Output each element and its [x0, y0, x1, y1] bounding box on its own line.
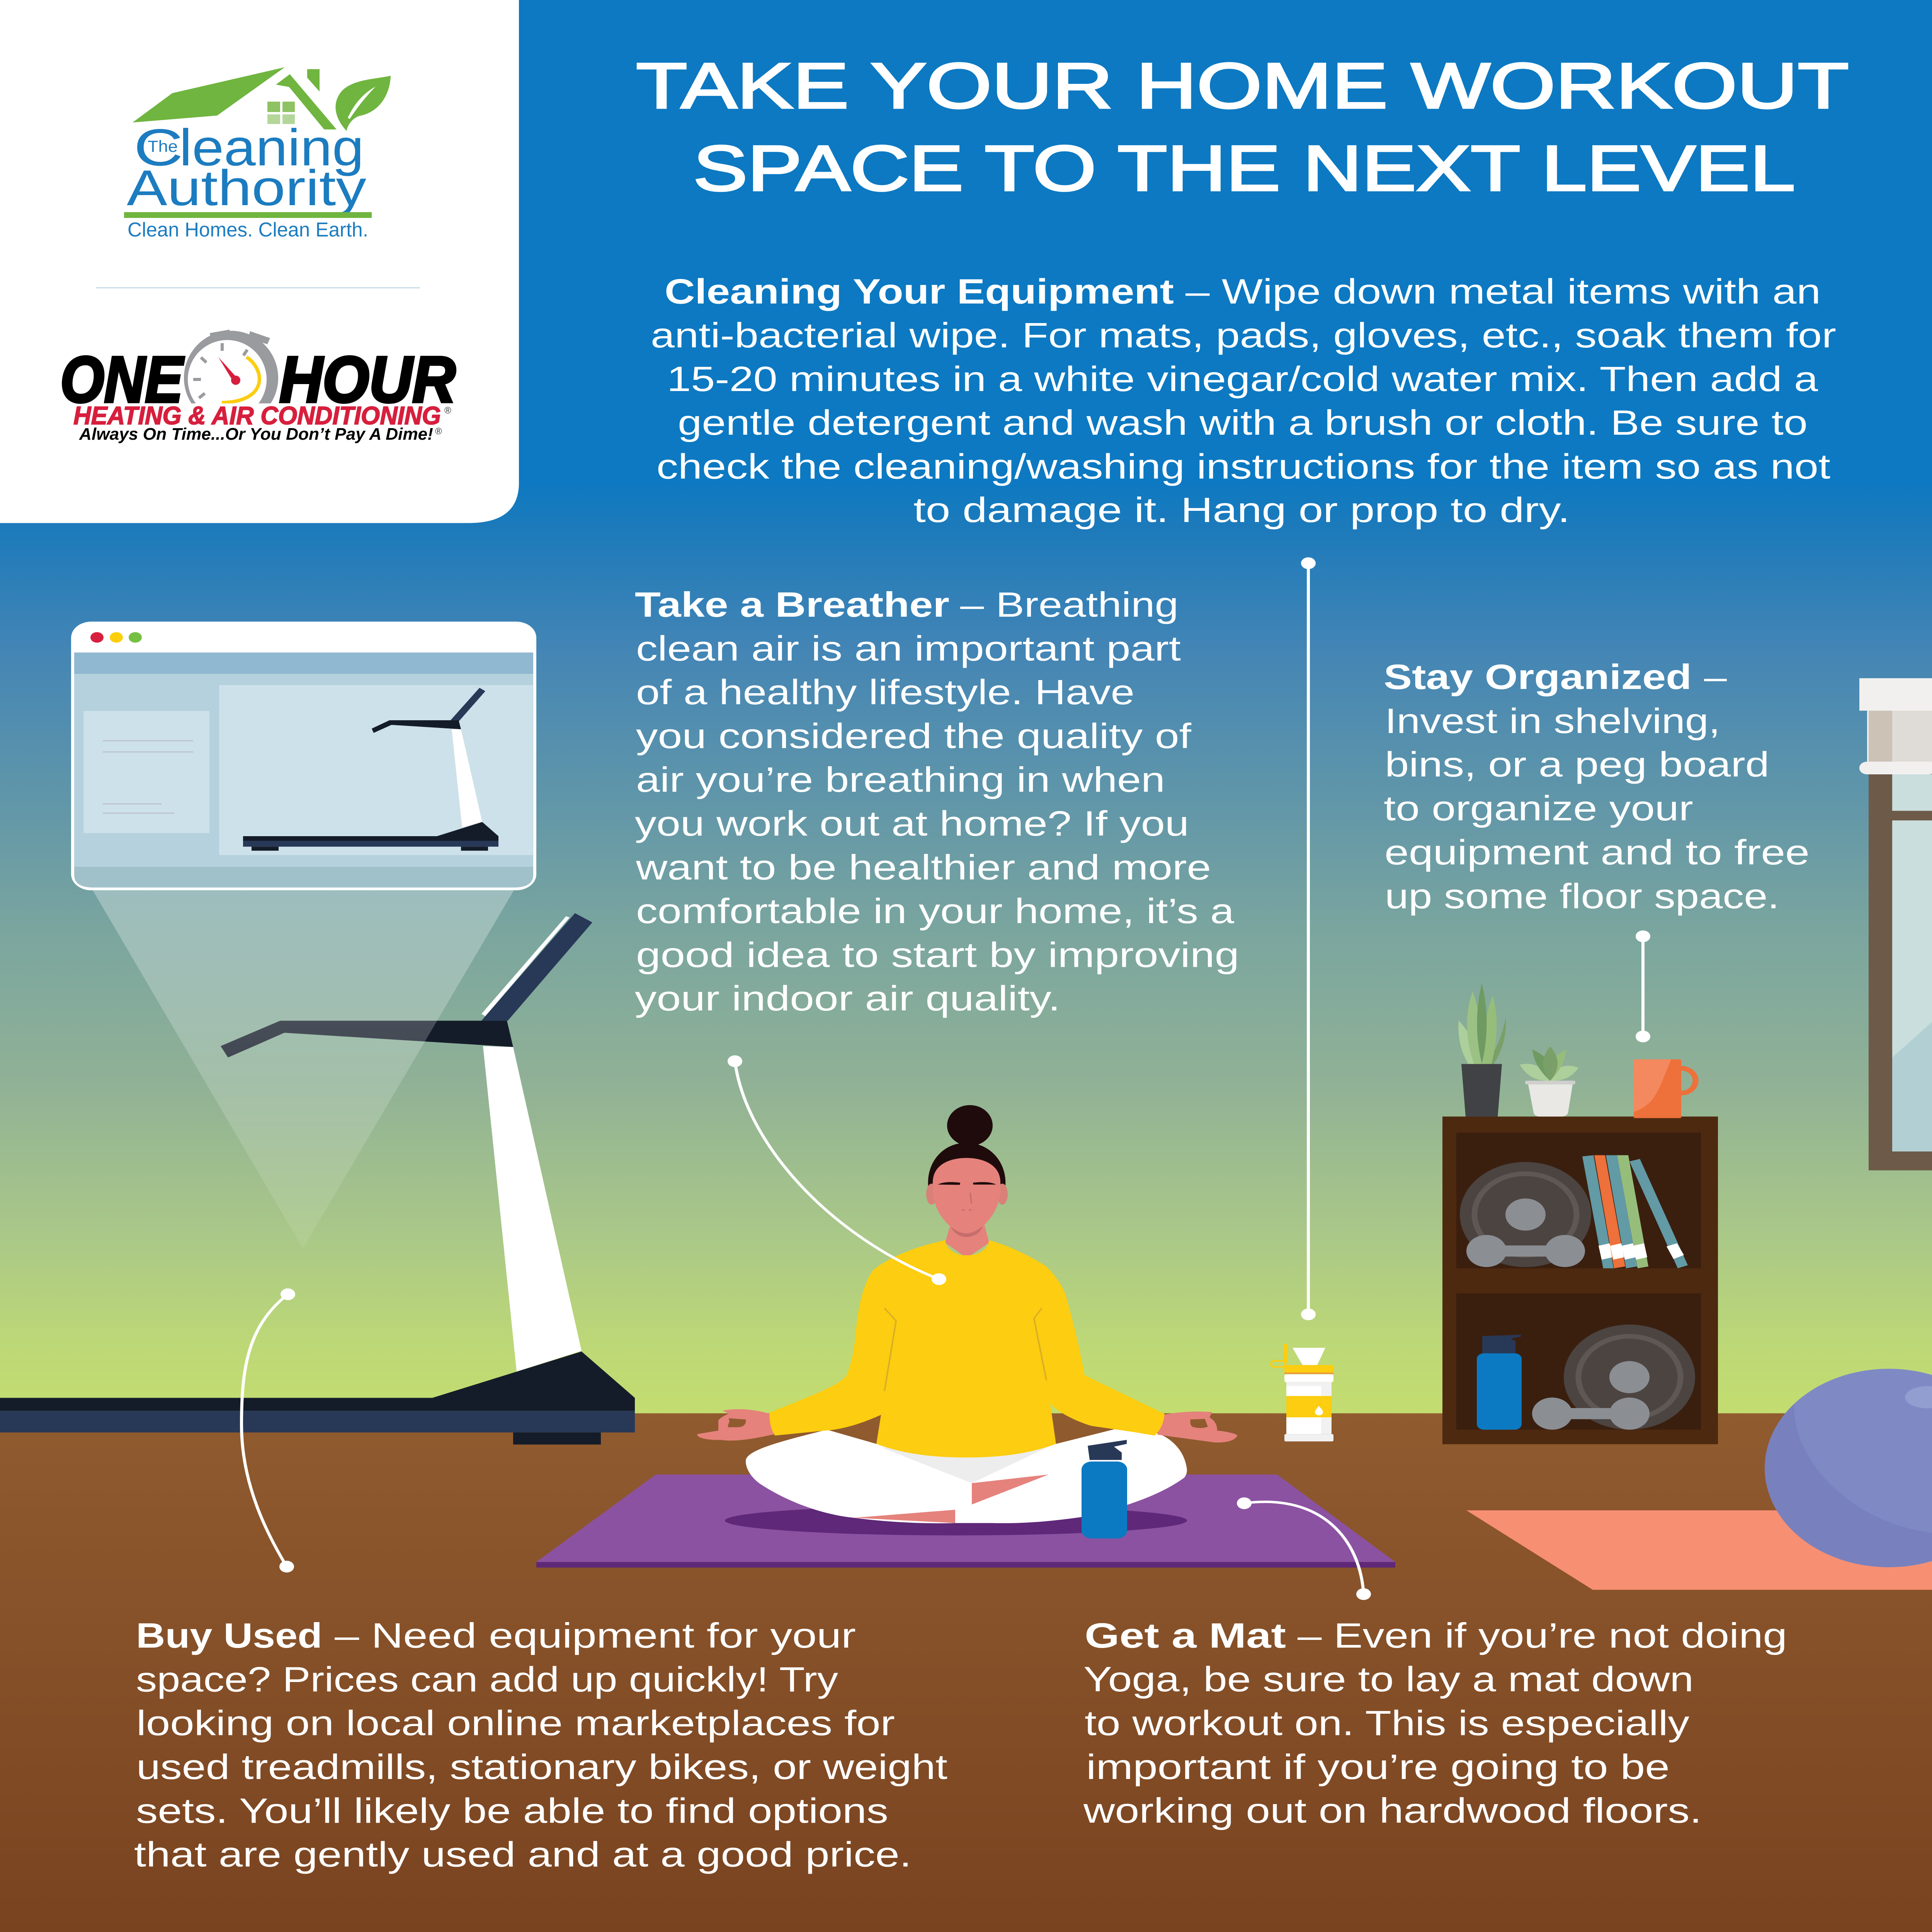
text block: Take a Breather: good idea to start by improving	[636, 935, 1239, 975]
weight plate and dumbbell, top shelf	[1460, 1162, 1591, 1267]
text block: Cleaning Your Equipment: – Wipe down metal items with an	[1185, 272, 1821, 311]
small bottle on shelf	[1477, 1335, 1522, 1430]
text block: Take a Breather: air you’re breathing in when	[636, 760, 1165, 799]
window with blind	[1859, 678, 1932, 1170]
panel: white logo card	[0, 0, 519, 523]
text block: Stay Organized: equipment and to free	[1384, 833, 1810, 872]
text block: Take a Breather: you work out at home? If you	[635, 804, 1189, 843]
text block: Take a Breather: your indoor air quality.	[635, 979, 1060, 1018]
text block: Get a Mat: to workout on. This is especially	[1085, 1703, 1689, 1743]
treadmill upright post	[483, 1046, 582, 1372]
weight plate and dumbbell, bottom shelf	[1532, 1325, 1695, 1430]
logo: The Cleaning Authority: Clean Homes. Clean Earth.	[128, 219, 368, 241]
logo: The Cleaning Authority: Authority	[127, 160, 366, 216]
orange mug	[1634, 1060, 1696, 1118]
text block: Stay Organized: –	[1704, 657, 1727, 697]
background: wooden floor	[0, 1413, 1932, 1932]
callout line: Get a Mat	[1237, 1497, 1371, 1600]
crossed legs	[746, 1429, 1187, 1523]
ears	[926, 1184, 1008, 1205]
window control dots	[90, 632, 142, 643]
woman meditating	[697, 1105, 1237, 1539]
text block: Stay Organized	[1384, 657, 1810, 916]
text block: Buy Used: used treadmills, stationary bikes, or weight	[136, 1747, 947, 1786]
text block: Take a Breather: you considered the quality of	[636, 716, 1191, 755]
projection light cone	[93, 890, 514, 1248]
text block: Get a Mat: – Even if you’re not doing	[1298, 1616, 1787, 1655]
text block: Buy Used: sets. You’ll likely be able to find options	[136, 1791, 888, 1830]
text block: Take a Breather: clean air is an important part	[636, 629, 1181, 668]
cleaning spray bottle	[1271, 1344, 1333, 1441]
text block: Buy Used: looking on local online marketplaces for	[136, 1703, 895, 1743]
text block: Take a Breather: comfortable in your home, it’s a	[636, 891, 1235, 930]
text block: Take a Breather	[635, 585, 1239, 1018]
title: SPACE TO THE NEXT LEVEL	[693, 132, 1795, 204]
chin shadow	[951, 1224, 982, 1237]
logo: One Hour Heating and Air Conditioning: ®	[444, 405, 451, 416]
callout line: Take a Breather	[728, 1055, 946, 1285]
logo: One Hour Heating and Air Conditioning: HOUR	[279, 343, 456, 416]
text block: Stay Organized: Stay Organized	[1384, 657, 1692, 697]
background: sky gradient	[0, 0, 1932, 1414]
listing text card	[83, 711, 209, 833]
text block: Cleaning Your Equipment: gentle detergent and wash with a brush or cloth. Be sure to	[678, 403, 1808, 442]
treadmill handle	[221, 1021, 513, 1058]
yoga mat	[536, 1475, 1395, 1568]
text block: Cleaning Your Equipment: Cleaning Your Equipment	[665, 272, 1174, 311]
neck	[945, 1224, 989, 1258]
orange exercise mat	[1466, 1510, 1932, 1590]
callout line: Cleaning Your Equipment	[1301, 557, 1316, 1320]
logo: One Hour Heating and Air Conditioning: ONE	[60, 343, 184, 416]
hair	[928, 1143, 1005, 1186]
callout line: Buy Used	[242, 1288, 295, 1573]
text block: Cleaning Your Equipment: check the cleaning/washing instructions for the item so as not	[656, 447, 1830, 486]
exercise ball	[1765, 1360, 1932, 1567]
text block: Take a Breather: of a healthy lifestyle. Have	[636, 672, 1134, 712]
text block: Buy Used: space? Prices can add up quickly! Try	[136, 1660, 838, 1699]
text block: Stay Organized: Invest in shelving,	[1385, 701, 1720, 740]
right hand	[1157, 1412, 1237, 1442]
text block: Get a Mat: Get a Mat	[1085, 1616, 1286, 1655]
text block: Get a Mat: Yoga, be sure to lay a mat down	[1083, 1660, 1694, 1699]
text block: Cleaning Your Equipment	[651, 272, 1836, 530]
mini treadmill	[243, 688, 498, 851]
text block: Take a Breather: Take a Breather	[635, 585, 949, 624]
face	[933, 1158, 1000, 1233]
text block: Stay Organized: bins, or a peg board	[1385, 745, 1769, 784]
sweater	[769, 1240, 1165, 1458]
treadmill console arm	[481, 913, 592, 1021]
left hand	[697, 1409, 775, 1440]
books	[1582, 1155, 1688, 1268]
water bottle	[1082, 1440, 1127, 1539]
logo: One Hour Heating and Air Conditioning: Always On Time...Or You Don’t Pay A Dime!	[79, 425, 433, 444]
text block: Take a Breather: – Breathing	[960, 585, 1179, 624]
title	[636, 49, 1849, 204]
logo: The Cleaning Authority	[124, 67, 391, 241]
text block: Buy Used: that are gently used and at a good price.	[134, 1835, 912, 1874]
logo: One Hour Heating and Air Conditioning	[60, 330, 456, 444]
text block: Cleaning Your Equipment: anti-bacterial wipe. For mats, pads, gloves, etc., soak them for	[651, 316, 1836, 355]
tall plant in dark pot	[1458, 983, 1506, 1117]
text block: Take a Breather: want to be healthier and more	[636, 848, 1211, 887]
text block: Stay Organized: to organize your	[1384, 789, 1693, 828]
browser window with treadmill listing	[71, 622, 536, 1248]
title: TAKE YOUR HOME WORKOUT	[636, 49, 1849, 122]
text block: Buy Used: Buy Used	[136, 1616, 322, 1655]
logo: The Cleaning Authority: The	[148, 137, 178, 155]
text block: Get a Mat: important if you’re going to be	[1086, 1747, 1670, 1786]
text block: Stay Organized: up some floor space.	[1385, 876, 1779, 916]
treadmill	[0, 913, 635, 1444]
bookshelf with weights, books and bottle	[1442, 1117, 1718, 1444]
hair bun	[947, 1105, 993, 1146]
listing image panel	[219, 685, 533, 855]
succulent in white pot	[1520, 1046, 1578, 1117]
logo: One Hour Heating and Air Conditioning: ®	[435, 426, 442, 437]
text block: Cleaning Your Equipment: to damage it. Hang or prop to dry.	[913, 490, 1570, 530]
treadmill base	[0, 1352, 635, 1444]
text block: Get a Mat: working out on hardwood floors.	[1083, 1791, 1702, 1830]
text block: Get a Mat	[1083, 1616, 1787, 1830]
callout line: Stay Organized	[1636, 930, 1650, 1043]
logo: One Hour Heating and Air Conditioning: HEATING & AIR CONDITIONING	[73, 401, 441, 430]
logo: The Cleaning Authority: C	[134, 118, 183, 177]
logo: The Cleaning Authority: leaning	[179, 119, 364, 177]
text block: Buy Used: – Need equipment for your	[335, 1616, 856, 1655]
text block: Cleaning Your Equipment: 15-20 minutes in a white vinegar/cold water mix. Then add a	[667, 359, 1818, 398]
text block: Buy Used	[134, 1616, 947, 1874]
